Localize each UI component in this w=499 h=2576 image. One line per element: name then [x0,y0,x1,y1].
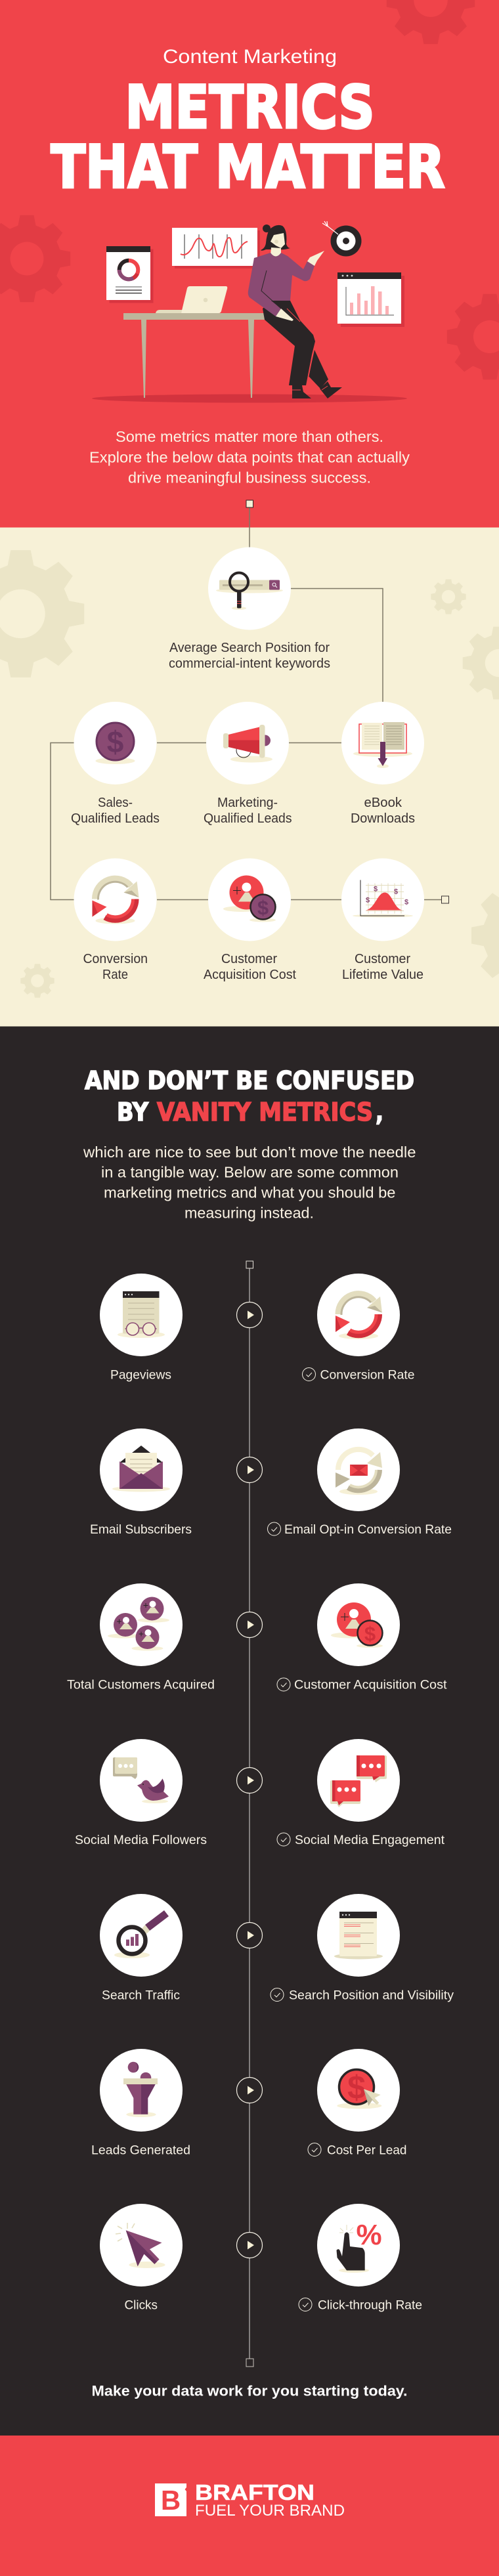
label: Sales- [98,796,133,810]
icon: refresh arrows [336,1294,382,1339]
check mark [268,1522,281,1535]
icon: bell curve chart [353,880,413,918]
icon: customer with red coin: $ [364,1622,376,1645]
row 3 left: total customers acquired [67,1583,215,1692]
label: Qualified Leads [71,811,160,826]
laptop [156,286,227,313]
tagline: FUEL YOUR BRAND [195,2502,345,2520]
intro paragraph: which are nice to see but don’t move the needle [83,1144,416,1161]
label: Rate [102,968,128,982]
row 6 right: cost per lead [308,2049,407,2157]
icon: three customers [108,1597,169,1650]
icon: coin with cursor: $ [347,2069,366,2106]
label: Acquisition Cost [204,968,296,982]
logo mark: B [161,2485,181,2516]
illustration: hero scene [92,221,407,403]
bar chart window [337,272,404,327]
label: Conversion Rate [320,1368,415,1383]
row 7 right: click-through rate [299,2204,422,2312]
label: Social Media Followers [75,1833,207,1847]
heading: AND DON’T BE CONFUSED [85,1066,414,1095]
intro paragraph: measuring instead. [184,1204,314,1221]
icon: envelope [112,1446,170,1492]
target with arrow [322,221,361,256]
connector start square [246,500,253,507]
intro text [89,428,410,486]
label: Search Position and Visibility [289,1988,454,2002]
intro text: Some metrics matter more than others. [116,428,383,445]
icon: customer with red coin [331,1602,383,1648]
panel: red header [0,0,499,528]
label: Customer [221,952,277,966]
heading: VANITY METRICS [157,1098,373,1127]
icon: envelope in cycle arrows [336,1449,382,1495]
label: Average Search Position for [169,641,330,655]
icon: megaphone [223,725,272,763]
row 6 left: leads generated [91,2049,190,2157]
gear: left [0,215,70,302]
row 2 right: email opt-in conversion rate [268,1428,452,1537]
person [248,225,342,398]
label [351,796,415,826]
row 2 left: email subscribers [90,1428,192,1537]
item: sales-qualified leads [71,702,160,826]
icon: dollar coin [96,723,135,764]
panel: cream metrics [0,507,499,1027]
check mark [308,2143,321,2156]
title [51,74,445,202]
row 4 right: social media engagement [277,1739,445,1847]
icon: search bar magnifier [216,572,283,610]
brand name: BRAFTON [195,2480,315,2504]
label: Marketing- [217,796,278,810]
gears: cream background [0,550,499,998]
row 7 left: clicks [100,2204,183,2312]
heading: BY [117,1098,148,1127]
icon: page with glasses [118,1291,165,1338]
check mark [302,1368,315,1381]
icon: two chat bubbles [330,1755,387,1807]
icon: coin with cursor [337,2069,381,2109]
gear: right [447,294,499,379]
closing line: Make your data work for you starting today. [92,2383,407,2399]
play markers [236,1302,263,2258]
row 1 right: conversion rate [302,1274,415,1383]
subtitle: Content Marketing [163,46,337,68]
label: Cost Per Lead [327,2143,407,2157]
label: Click-through Rate [318,2298,422,2312]
intro paragraph: in a tangible way. Below are some common [101,1163,399,1180]
intro paragraph [83,1144,416,1221]
label: Search Traffic [102,1988,180,2002]
icon: dollar coin: $ [107,725,123,759]
item: customer acquisition cost [204,859,296,982]
icon: hand and percent [336,2219,382,2273]
check mark [299,2298,312,2311]
label: Downloads [351,811,415,826]
icon: refresh arrows [92,878,139,924]
icon: bell curve chart: $ [374,885,378,893]
timeline [236,1261,263,2367]
label: Clicks [125,2298,158,2312]
label [83,952,148,982]
icon: cursor arrow [116,2223,165,2268]
icon: hand and percent: % [356,2219,382,2251]
check mark [271,1988,284,2001]
heading [85,1066,414,1127]
desk [123,313,268,398]
intro text: Explore the below data points that can actually [89,449,410,466]
icon: bell curve chart: $ [404,898,408,906]
icon: magnifier with bars [114,1910,169,1958]
label [204,796,292,826]
label: Email Opt-in Conversion Rate [284,1522,452,1537]
icon: funnel [123,2062,158,2117]
panel: dark vanity metrics [0,1027,499,2436]
item: marketing-qualified leads [204,702,292,826]
label: eBook [364,796,402,810]
icon: customer with coin [223,876,276,922]
label [169,641,330,671]
connector end square [441,896,449,903]
label: Customer Acquisition Cost [294,1678,447,1692]
row 5 right: search position and visibility [271,1894,454,2002]
row 5 left: search traffic [100,1894,183,2002]
label: Customer [355,952,410,966]
label: Leads Generated [91,2143,190,2157]
document with donut [106,246,154,303]
ground shadow [92,394,407,403]
title: METRICS [125,74,374,142]
intro text: drive meaningful business success. [128,469,371,486]
row 4 left: social media followers [75,1739,207,1847]
item: customer lifetime value [341,859,424,982]
item: conversion rate [74,859,156,982]
intro paragraph: marketing metrics and what you should be [104,1184,395,1201]
check mark [277,1833,290,1846]
label [204,952,296,982]
gear: top right [387,0,475,44]
label [342,952,423,982]
item: average search position [169,547,330,671]
connector lines [51,507,441,899]
row 3 right: customer acquisition cost [277,1583,447,1692]
panel: red footer [0,2436,499,2576]
icon: results page [334,1912,383,1959]
label: commercial-intent keywords [169,656,330,671]
icon: customer with coin: $ [257,896,269,919]
label: Conversion [83,952,148,966]
line chart [172,228,260,268]
check mark [277,1678,290,1691]
icon: book with download arrow [353,722,412,768]
label: Email Subscribers [90,1522,192,1537]
label [71,796,160,826]
icon: bell curve chart: $ [366,897,370,905]
row 1 left: pageviews [100,1274,183,1383]
icon: bell curve chart: $ [394,888,398,895]
label: Lifetime Value [342,968,423,982]
title: THAT MATTER [51,133,445,202]
icon: speech bubble and bird [113,1757,169,1803]
label: Pageviews [110,1368,171,1383]
heading: , [376,1098,383,1127]
logo mark [155,2483,186,2516]
label: Social Media Engagement [295,1833,445,1847]
item: ebook downloads [341,702,424,826]
label: Total Customers Acquired [67,1678,215,1692]
label: Qualified Leads [204,811,292,826]
